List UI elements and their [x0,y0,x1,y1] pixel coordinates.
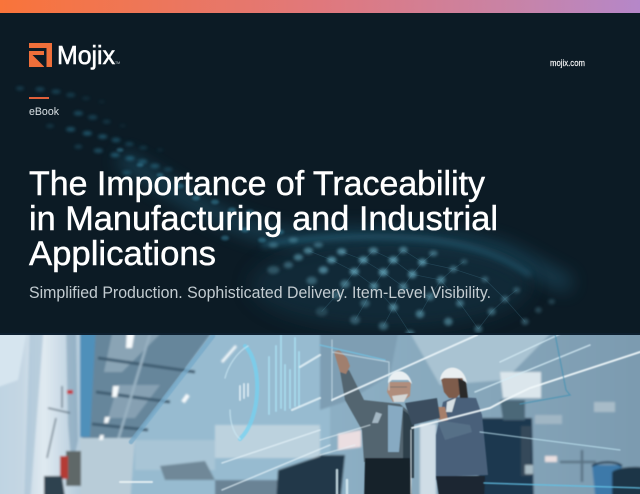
logo wordmark: Mojix [57,40,115,70]
title [29,165,498,273]
ceiling [82,335,210,439]
upper-left dots [16,86,173,175]
trousers [436,476,485,494]
label: eBook: eBook [29,106,59,118]
icon: Mojix square mark [29,43,52,67]
logo: Mojix [29,40,120,70]
dotted data wave background [16,86,570,337]
bar chart [269,335,299,414]
holographic overlay lines [120,334,640,494]
tablet [405,398,440,425]
top gradient bar [0,0,640,13]
back wall [80,438,135,494]
floor machinery [160,461,215,480]
dark background panel [0,13,640,335]
wave network lines [308,250,525,333]
factory background [0,324,640,494]
trousers [364,458,412,494]
percentage reading [240,384,248,400]
website url: mojix.com [550,58,585,69]
subtitle: Simplified Production. Sophisticated Delivery. Item-Level Visibility. [29,283,491,302]
title: in Manufacturing and Industrial [29,200,498,238]
hard hat [388,371,412,384]
dark edge above photo [0,333,640,335]
glass hall behind overlay [320,408,330,455]
overlay streaks [131,336,213,442]
hand [438,406,448,422]
left wall [0,324,80,494]
extinguisher and equipment [66,451,81,486]
head and hair [441,378,463,398]
dark machine behind woman [478,418,534,494]
hard hat [440,368,467,383]
title: Applications [29,235,216,273]
head [387,382,411,402]
right side background panels [410,335,550,386]
jacket [436,397,488,480]
pale column between figures [420,424,436,494]
pink panel [338,430,361,450]
wave dots [267,237,555,337]
dots behind title [116,148,284,242]
woman [431,368,488,494]
circular gauge [240,346,257,439]
title: The Importance of Traceability [29,165,485,203]
man [334,350,414,494]
photo: engineers in factory with holographic overlay [0,324,640,494]
trademark: TM [115,61,120,65]
wave glow [120,158,570,285]
hand [334,350,350,374]
orange accent line [29,97,49,99]
raised arm and jacket [340,370,409,462]
blue pipes [80,324,96,437]
ceiling lights [126,330,135,348]
